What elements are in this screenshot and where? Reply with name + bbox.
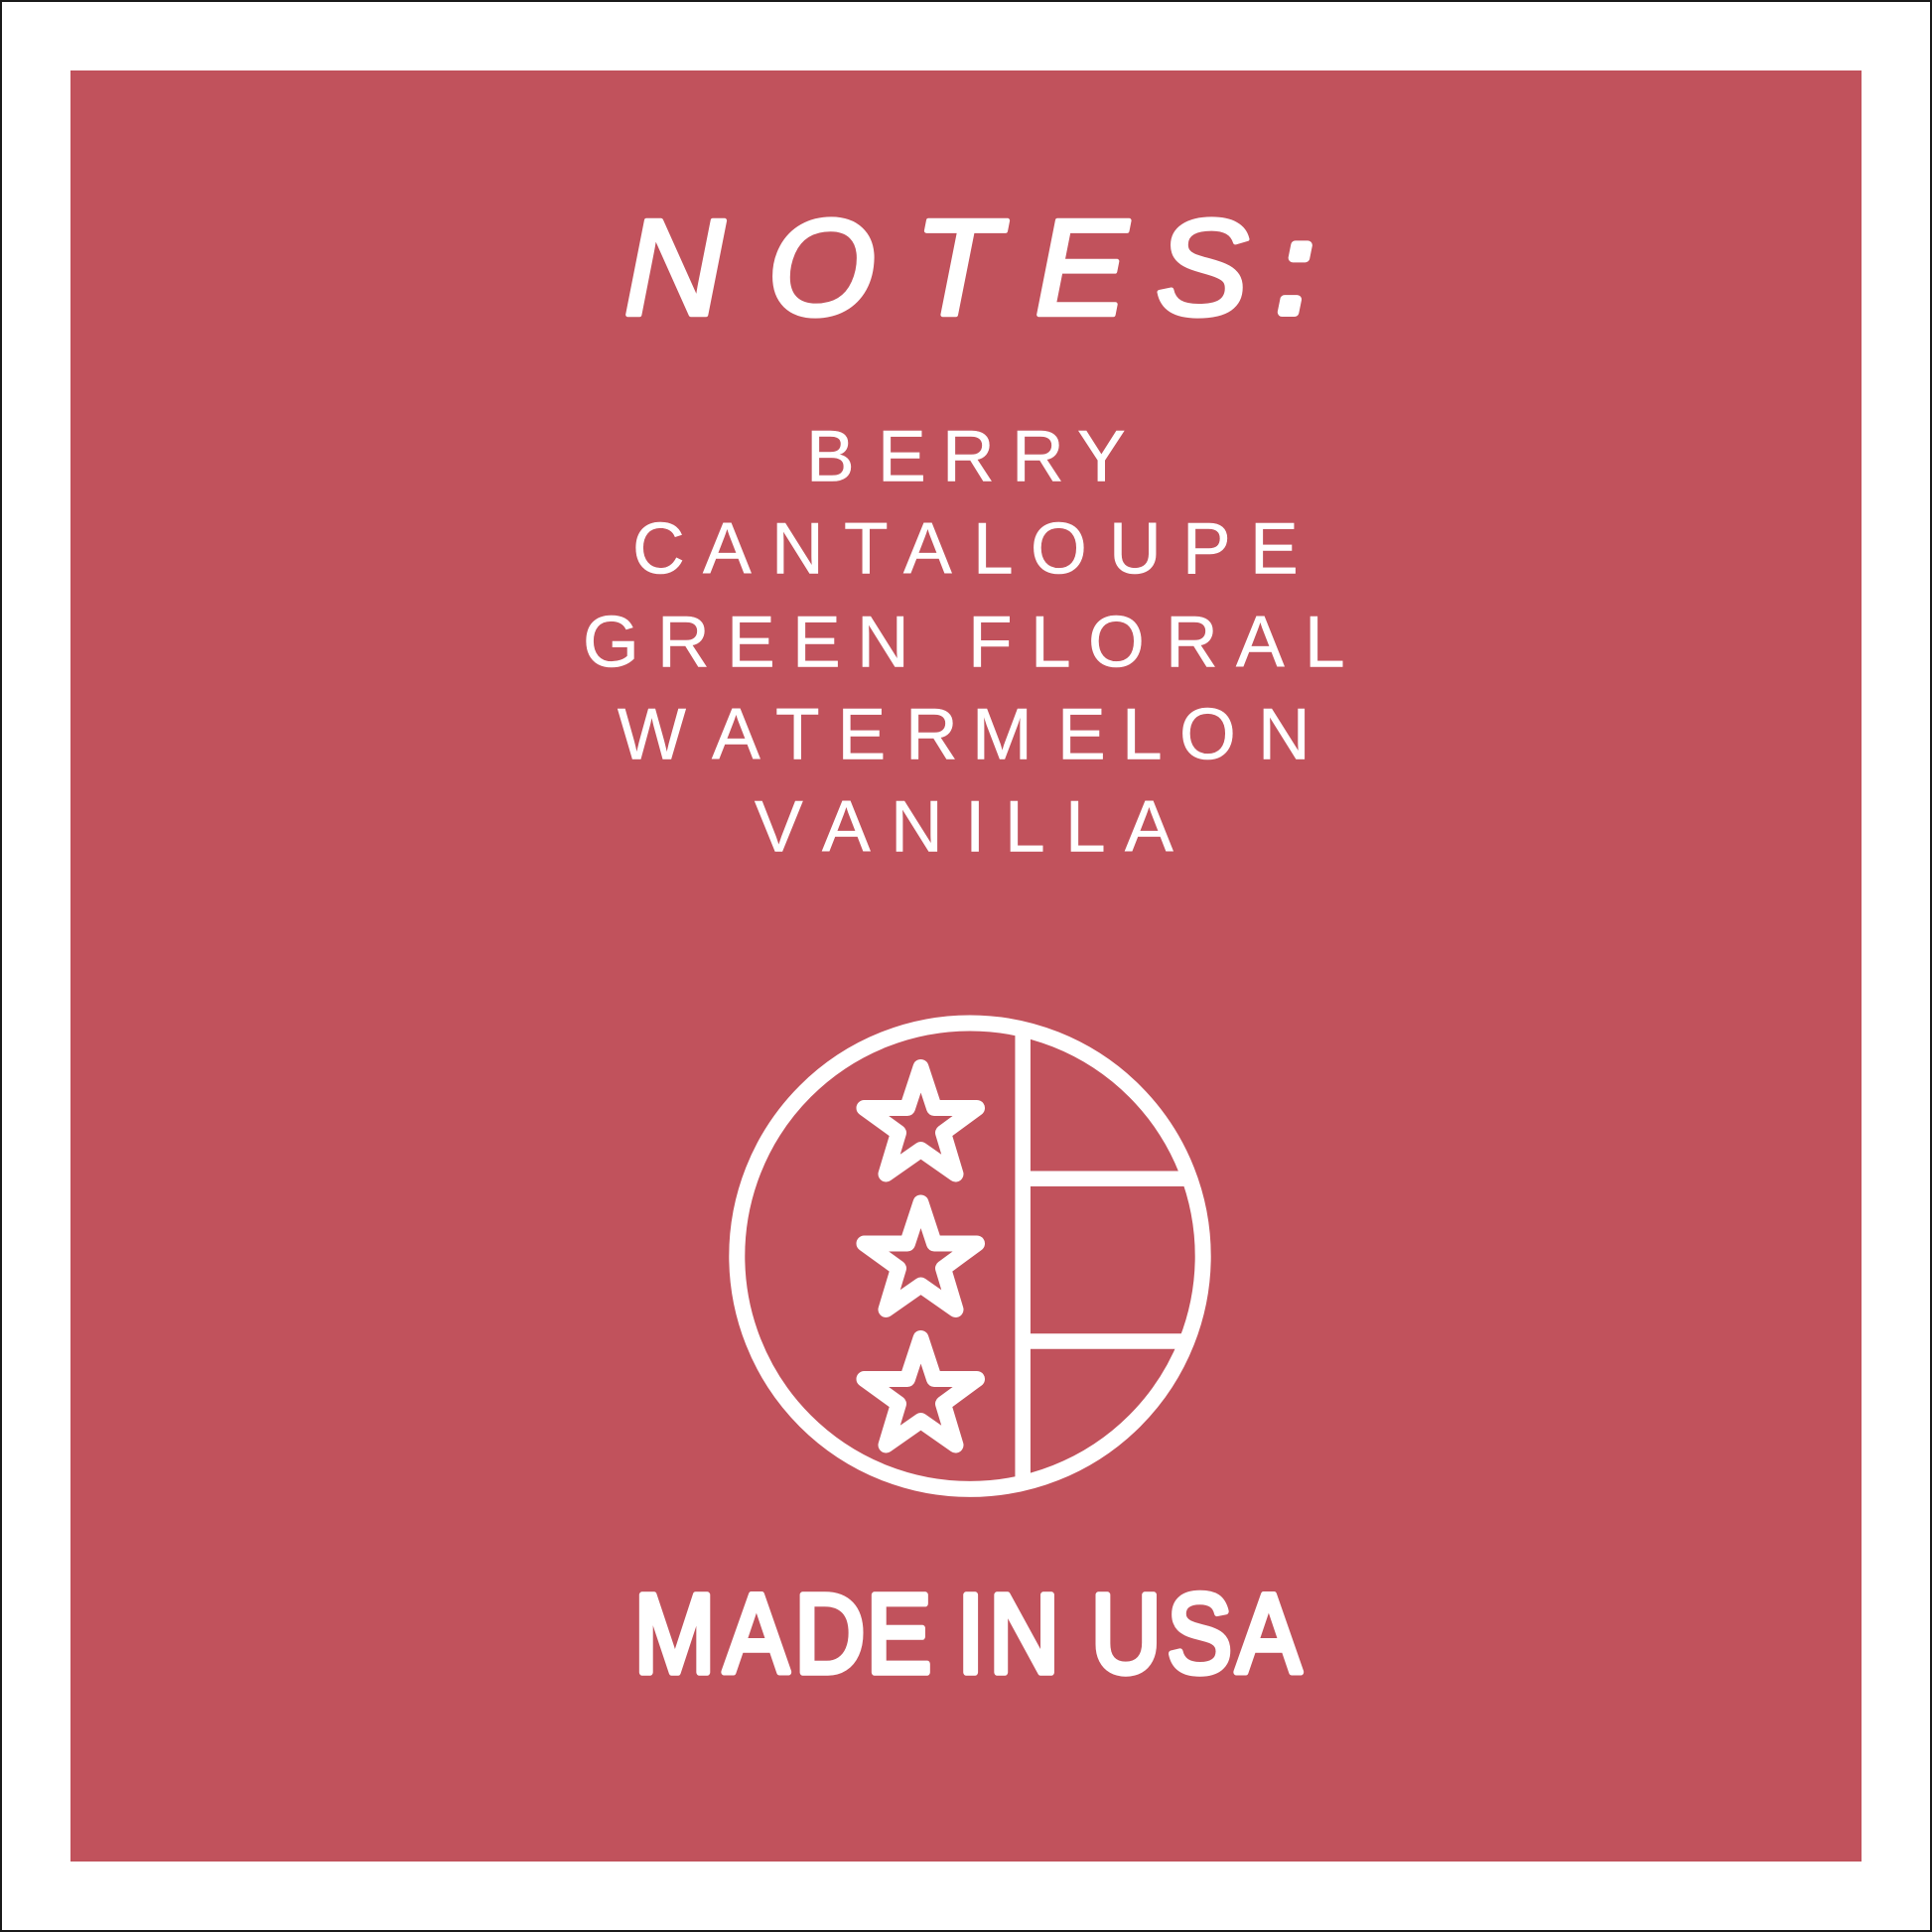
text block: flavor notes bbox=[583, 416, 1345, 868]
label: made in USA: MADE IN USA bbox=[634, 1572, 1302, 1697]
text block: flavor notes: GREEN FLORAL bbox=[583, 602, 1345, 682]
text block: flavor notes: VANILLA bbox=[755, 787, 1173, 868]
title: : bbox=[1277, 199, 1312, 340]
icon: globe with flag stars bbox=[737, 1023, 1203, 1489]
text block: flavor notes: CANTALOUPE bbox=[632, 509, 1299, 590]
text block: flavor notes: BERRY bbox=[806, 416, 1126, 496]
title: NOTES bbox=[623, 191, 1249, 345]
text block: flavor notes: WATERMELON bbox=[618, 695, 1311, 775]
